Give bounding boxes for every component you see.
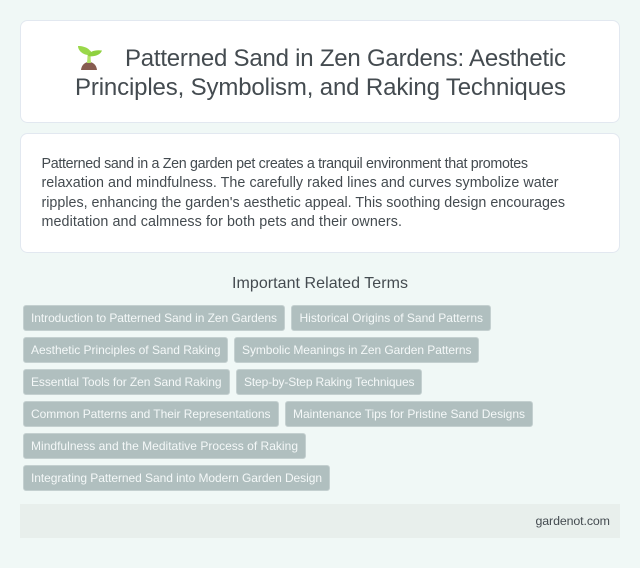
title: Principles, Symbolism, and Raking Techniques [75, 74, 566, 101]
panel: description: relaxation and mindfulness. The carefully raked lines and curves symbolize water [42, 175, 559, 191]
panel: description: ripples, enhancing the garden's aesthetic appeal. This soothing design encourages [42, 195, 565, 211]
tag: Essential Tools for Zen Sand Raking [31, 375, 222, 389]
panel: description: meditation and calmness for both pets and their owners. [42, 214, 402, 230]
tag: Introduction to Patterned Sand in Zen Gardens [31, 311, 277, 325]
tag [286, 402, 532, 426]
tag: Historical Origins of Sand Patterns [300, 311, 483, 325]
tag: Integrating Patterned Sand into Modern Garden Design [31, 471, 322, 485]
icon: seedling [78, 46, 102, 70]
tag: Common Patterns and Their Representations [31, 407, 270, 421]
tag [24, 370, 230, 394]
tag: Maintenance Tips for Pristine Sand Designs [293, 407, 525, 421]
heading: related terms: Important Related Terms [232, 275, 408, 292]
panel: description [20, 134, 620, 252]
footer bar [20, 504, 620, 538]
tag [234, 338, 478, 362]
tag: Step-by-Step Raking Techniques [244, 375, 414, 389]
tag [24, 466, 330, 490]
panel: related term tags [24, 306, 532, 490]
tag [24, 402, 278, 426]
tag: Mindfulness and the Meditative Process of Raking [31, 439, 298, 453]
tag: Aesthetic Principles of Sand Raking [31, 343, 220, 357]
title [75, 45, 566, 101]
tag [24, 434, 306, 458]
panel: title card [20, 20, 620, 122]
footer bar: gardenot.com [536, 514, 610, 528]
title: Patterned Sand in Zen Gardens: Aesthetic [125, 45, 566, 72]
tag [24, 338, 228, 362]
panel: description: Patterned sand in a Zen garden pet creates a tranquil environment that promotes [42, 156, 528, 172]
tag: Symbolic Meanings in Zen Garden Patterns [242, 343, 472, 357]
tag [236, 370, 422, 394]
tag [24, 306, 284, 330]
tag [292, 306, 490, 330]
